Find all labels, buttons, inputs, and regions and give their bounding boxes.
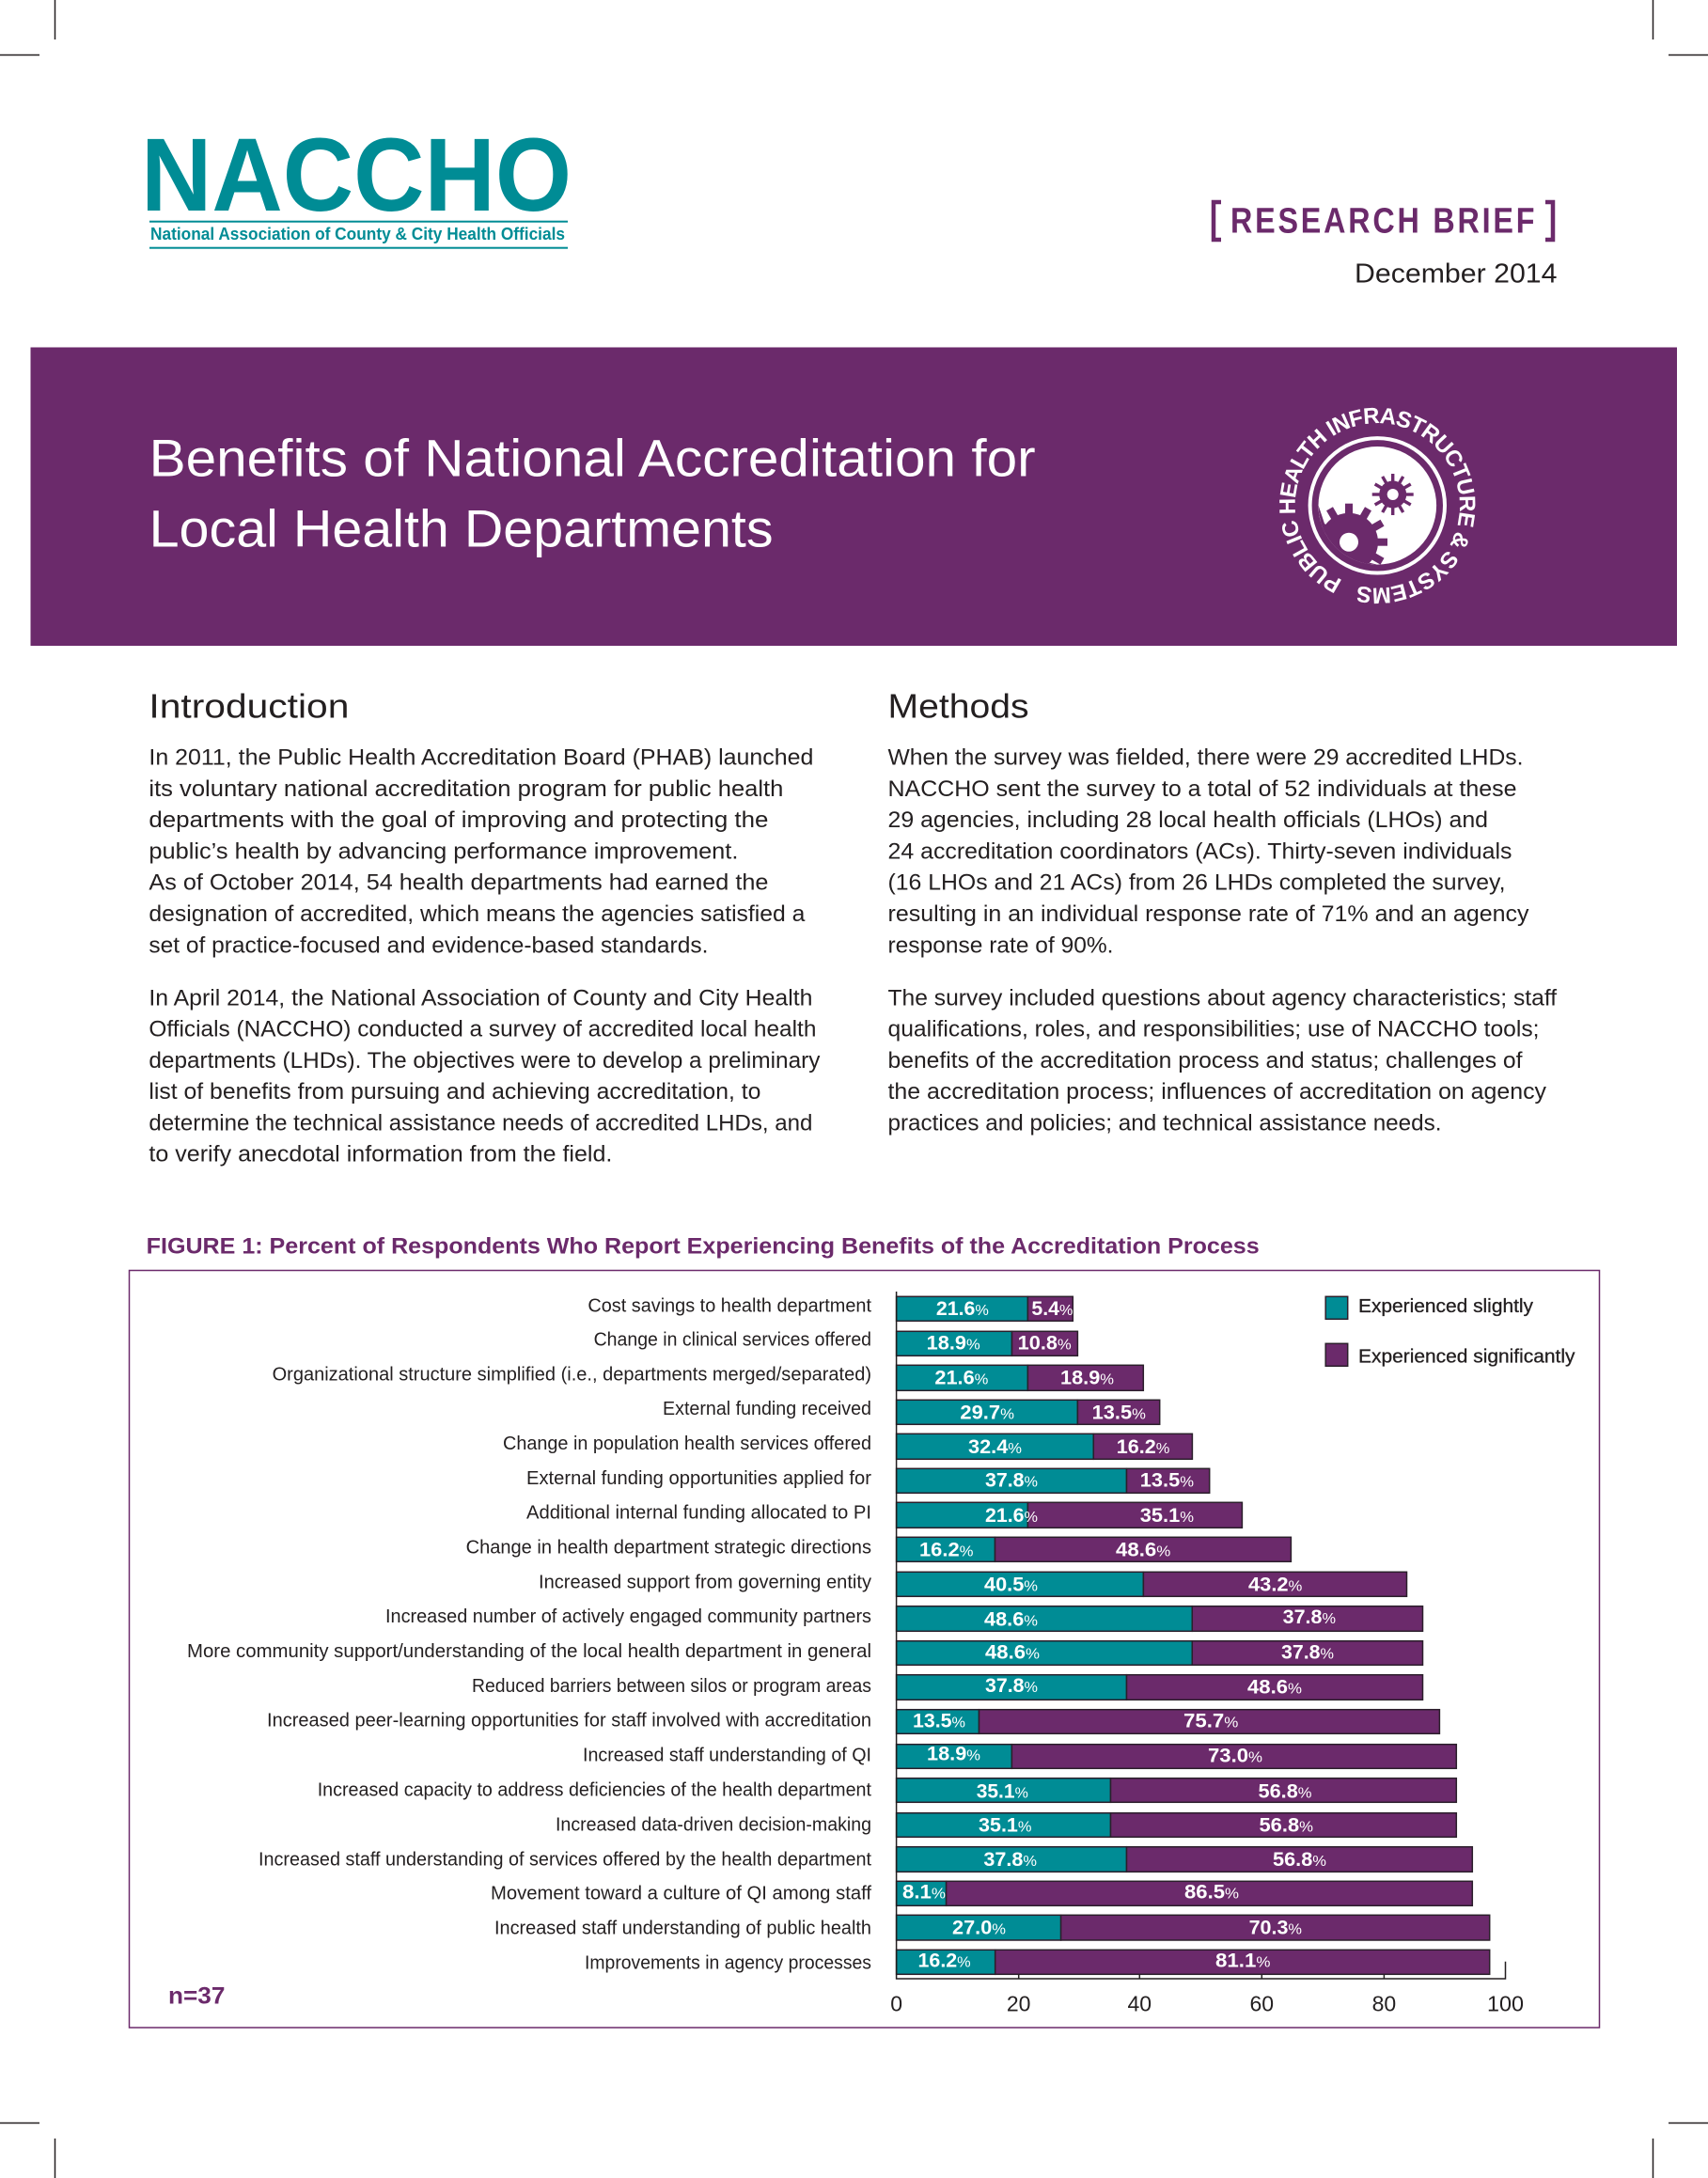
- bar: understanding of QI: Increased staff understanding of QI: [583, 1744, 871, 1765]
- bar: community support: More community support/understanding of the local health department in general: [187, 1640, 871, 1662]
- bar: culture of QI: 86.5%: [1184, 1881, 1239, 1903]
- bar: funding opportunities: External funding opportunities applied for: [526, 1467, 871, 1489]
- bar: understanding of services: [259, 1847, 1472, 1872]
- figure frame: [130, 1271, 1600, 2028]
- text block: methods paragraph 2: The survey included questions about agency characteristics; staff: [887, 985, 1557, 1011]
- bar: governing entity: [539, 1571, 1406, 1596]
- bar: organizational structure: 18.9%: [1060, 1368, 1114, 1389]
- text block: introduction paragraph 1: its voluntary national accreditation program for public health: [149, 776, 783, 802]
- bar: peer learning: [267, 1710, 1439, 1733]
- bar: internal funding: [526, 1501, 1242, 1528]
- text block: introduction paragraph 1: departments with the goal of improving and protecting the: [149, 807, 768, 833]
- bar: governing entity: 40.5%: [984, 1575, 1038, 1596]
- legend: Experienced slightly: [1358, 1296, 1533, 1317]
- sample size note: n=37: [168, 1983, 225, 2010]
- bar: community partners: Increased number of actively engaged community partners: [385, 1606, 871, 1627]
- chart axis: 60: [1250, 1991, 1274, 2015]
- text block: introduction paragraph 1: As of October 2014, 54 health departments had earned the: [149, 870, 768, 896]
- bar: external funding received: [663, 1398, 1160, 1424]
- text block: introduction paragraph 1: designation of accredited, which means the agencies satisfied a: [149, 901, 806, 927]
- bar: organizational structure: Organizational structure simplified (i.e., departments merged/separated): [273, 1363, 871, 1385]
- bar: understanding of services: 56.8%: [1273, 1849, 1326, 1871]
- bar: agency processes: [585, 1950, 1490, 1974]
- bar: strategic directions: 16.2%: [919, 1540, 974, 1561]
- bar: internal funding: 21.6%: [985, 1505, 1038, 1527]
- chart axis: 40: [1128, 1991, 1152, 2015]
- bar: understanding of services: 37.8%: [983, 1849, 1037, 1871]
- bar: strategic directions: Change in health department strategic directions: [466, 1536, 871, 1558]
- bar: governing entity: 43.2%: [1248, 1575, 1302, 1596]
- text block: methods paragraph 2: [887, 985, 1557, 1136]
- bar: reduced barriers: 37.8%: [985, 1675, 1038, 1697]
- bar: cost savings: Cost savings to health department: [588, 1295, 871, 1317]
- bar: understanding of QI: 73.0%: [1208, 1746, 1262, 1767]
- bar: community partners: 48.6%: [984, 1608, 1038, 1630]
- bar: capacity to address deficiencies: 56.8%: [1258, 1781, 1312, 1803]
- chart axis: 100: [1487, 1991, 1524, 2015]
- text block: methods paragraph 1: [887, 744, 1528, 958]
- panel: introduction: [149, 686, 820, 1167]
- bar: capacity to address deficiencies: Increased capacity to address deficiencies of the health department: [318, 1779, 871, 1801]
- bar: internal funding: Additional internal funding allocated to PI: [526, 1501, 871, 1523]
- bar: community support: [187, 1640, 1423, 1665]
- text block: introduction paragraph 2: Officials (NACCHO) conducted a survey of accredited local health: [149, 1017, 816, 1042]
- logo: NACCHO: National Association of County & City Health Officials: [150, 225, 565, 243]
- bar: funding opportunities: [526, 1467, 1210, 1493]
- bar: reduced barriers: [472, 1675, 1423, 1700]
- bar: culture of QI: 8.1%: [902, 1881, 946, 1903]
- bar: data-driven decisions: 56.8%: [1260, 1814, 1313, 1836]
- bar: understanding of QI: 18.9%: [927, 1744, 980, 1765]
- bar: external funding received: 13.5%: [1092, 1402, 1146, 1423]
- bar: clinical services: [594, 1329, 1077, 1355]
- text block: methods paragraph 2: qualifications, roles, and responsibilities; use of NACCHO tools;: [887, 1017, 1540, 1042]
- logo: NACCHO: NACCHO: [141, 118, 572, 233]
- bar: understanding of QI: [583, 1744, 1456, 1768]
- figure heading: FIGURE 1: Percent of Respondents Who Report Experiencing Benefits of the Accreditation Process: [147, 1233, 1260, 1259]
- bar: understanding of public health: 70.3%: [1249, 1917, 1302, 1938]
- bar: data-driven decisions: Increased data-driven decision-making: [556, 1814, 871, 1836]
- bar: community support: 37.8%: [1281, 1641, 1334, 1663]
- bar: cost savings: [588, 1295, 1073, 1321]
- bar: community partners: 37.8%: [1283, 1606, 1336, 1628]
- bar: community partners: [385, 1606, 1423, 1631]
- bar: population health services: 16.2%: [1117, 1436, 1169, 1458]
- text block: introduction paragraph 2: [149, 985, 820, 1167]
- bar: agency processes: 81.1%: [1215, 1951, 1271, 1972]
- bar: capacity to address deficiencies: [318, 1778, 1456, 1803]
- bar: funding opportunities: 37.8%: [985, 1470, 1038, 1492]
- chart axis: 80: [1372, 1991, 1396, 2015]
- bar: population health services: 32.4%: [968, 1436, 1022, 1458]
- bar: population health services: [503, 1433, 1192, 1459]
- text block: introduction paragraph 2: In April 2014, the National Association of County and City Health: [149, 985, 812, 1011]
- bar: external funding received: 29.7%: [960, 1402, 1014, 1423]
- text block: introduction paragraph 1: In 2011, the Public Health Accreditation Board (PHAB) launched: [149, 744, 813, 771]
- chart axis: 0: [890, 1991, 902, 2015]
- bar: external funding received: External funding received: [663, 1398, 871, 1419]
- text block: methods paragraph 1: 24 accreditation coordinators (ACs). Thirty-seven individuals: [887, 838, 1512, 864]
- bar: culture of QI: [491, 1881, 1472, 1905]
- bar chart: [187, 1292, 1524, 2015]
- text block: methods paragraph 1: 29 agencies, including 28 local health officials (LHOs) and: [887, 807, 1488, 833]
- bar: funding opportunities: 13.5%: [1140, 1470, 1194, 1492]
- text block: methods paragraph 1: resulting in an individual response rate of 71% and an agency: [887, 901, 1528, 927]
- text block: introduction paragraph 1: public’s health by advancing performance improvement.: [149, 838, 738, 864]
- bar: understanding of public health: 27.0%: [952, 1917, 1006, 1938]
- heading: methods: Methods: [887, 686, 1028, 726]
- bar: community support: 48.6%: [985, 1641, 1040, 1663]
- panel: methods: [887, 686, 1557, 1136]
- bar: peer learning: 75.7%: [1183, 1711, 1238, 1732]
- date: December 2014: [1355, 259, 1557, 290]
- chart axis: [890, 1292, 1524, 2015]
- bar: capacity to address deficiencies: 35.1%: [977, 1781, 1028, 1803]
- legend: Experienced significantly: [1358, 1346, 1575, 1367]
- text block: introduction paragraph 1: [149, 744, 813, 958]
- text block: methods paragraph 2: benefits of the accreditation process and status; challenges of: [887, 1048, 1523, 1073]
- bar: agency processes: Improvements in agency processes: [585, 1952, 871, 1974]
- bar: reduced barriers: 48.6%: [1247, 1677, 1302, 1699]
- bar: understanding of public health: Increased staff understanding of public health: [494, 1918, 871, 1939]
- bar: clinical services: 10.8%: [1018, 1333, 1072, 1355]
- bar: organizational structure: [273, 1363, 1143, 1390]
- bar: cost savings: 5.4%: [1031, 1298, 1073, 1320]
- title: [149, 429, 1036, 558]
- heading: introduction: Introduction: [149, 686, 349, 726]
- bar: data-driven decisions: 35.1%: [979, 1814, 1032, 1836]
- text block: methods paragraph 1: response rate of 90%.: [887, 932, 1113, 958]
- research brief label: RESEARCH BRIEF: [1230, 201, 1537, 241]
- text block: introduction paragraph 2: list of benefits from pursuing and achieving accreditation, to: [149, 1079, 760, 1105]
- text block: methods paragraph 1: (16 LHOs and 21 ACs) from 26 LHDs completed the survey,: [887, 870, 1506, 896]
- title banner: [30, 348, 1677, 646]
- text block: methods paragraph 1: NACCHO sent the survey to a total of 52 individuals at these: [887, 776, 1517, 802]
- legend: [1325, 1296, 1575, 1367]
- text block: methods paragraph 1: When the survey was fielded, there were 29 accredited LHDs.: [887, 744, 1523, 771]
- chart axis: 20: [1007, 1991, 1030, 2015]
- bar: understanding of services: Increased staff understanding of services offered by the health department: [259, 1849, 871, 1871]
- text block: introduction paragraph 2: departments (LHDs). The objectives were to develop a preliminary: [149, 1048, 820, 1073]
- bar: data-driven decisions: [556, 1813, 1456, 1837]
- bar: strategic directions: [466, 1536, 1291, 1561]
- bar: peer learning: Increased peer-learning opportunities for staff involved with accreditation: [267, 1710, 871, 1731]
- bar: clinical services: Change in clinical services offered: [594, 1329, 871, 1351]
- title: Local Health Departments: [149, 499, 774, 558]
- bar: reduced barriers: Reduced barriers between silos or program areas: [472, 1675, 871, 1697]
- bar: organizational structure: 21.6%: [934, 1368, 988, 1389]
- text block: introduction paragraph 2: determine the technical assistance needs of accredited LHDs, and: [149, 1110, 812, 1136]
- bar: clinical services: 18.9%: [927, 1333, 980, 1355]
- bar: understanding of public health: [494, 1915, 1490, 1940]
- title: Benefits of National Accreditation for: [149, 429, 1036, 488]
- bar: population health services: Change in population health services offered: [503, 1433, 871, 1454]
- text block: methods paragraph 2: practices and policies; and technical assistance needs.: [887, 1110, 1442, 1136]
- bar: cost savings: 21.6%: [936, 1298, 989, 1320]
- bar: internal funding: 35.1%: [1140, 1505, 1194, 1527]
- icon: public health infrastructure and systems seal: PUBLIC HEALTH INFRASTRUCTURE & SYSTEMS: [1279, 408, 1476, 603]
- text block: methods paragraph 2: the accreditation process; influences of accreditation on agency: [887, 1079, 1546, 1105]
- bar: culture of QI: Movement toward a culture of QI among staff: [491, 1883, 871, 1904]
- bar: governing entity: Increased support from governing entity: [539, 1571, 872, 1592]
- bar: agency processes: 16.2%: [917, 1951, 971, 1972]
- text block: introduction paragraph 1: set of practice-focused and evidence-based standards.: [149, 932, 708, 958]
- bar: peer learning: 13.5%: [913, 1711, 965, 1732]
- bar: strategic directions: 48.6%: [1116, 1540, 1170, 1561]
- text block: introduction paragraph 2: to verify anecdotal information from the field.: [149, 1141, 612, 1167]
